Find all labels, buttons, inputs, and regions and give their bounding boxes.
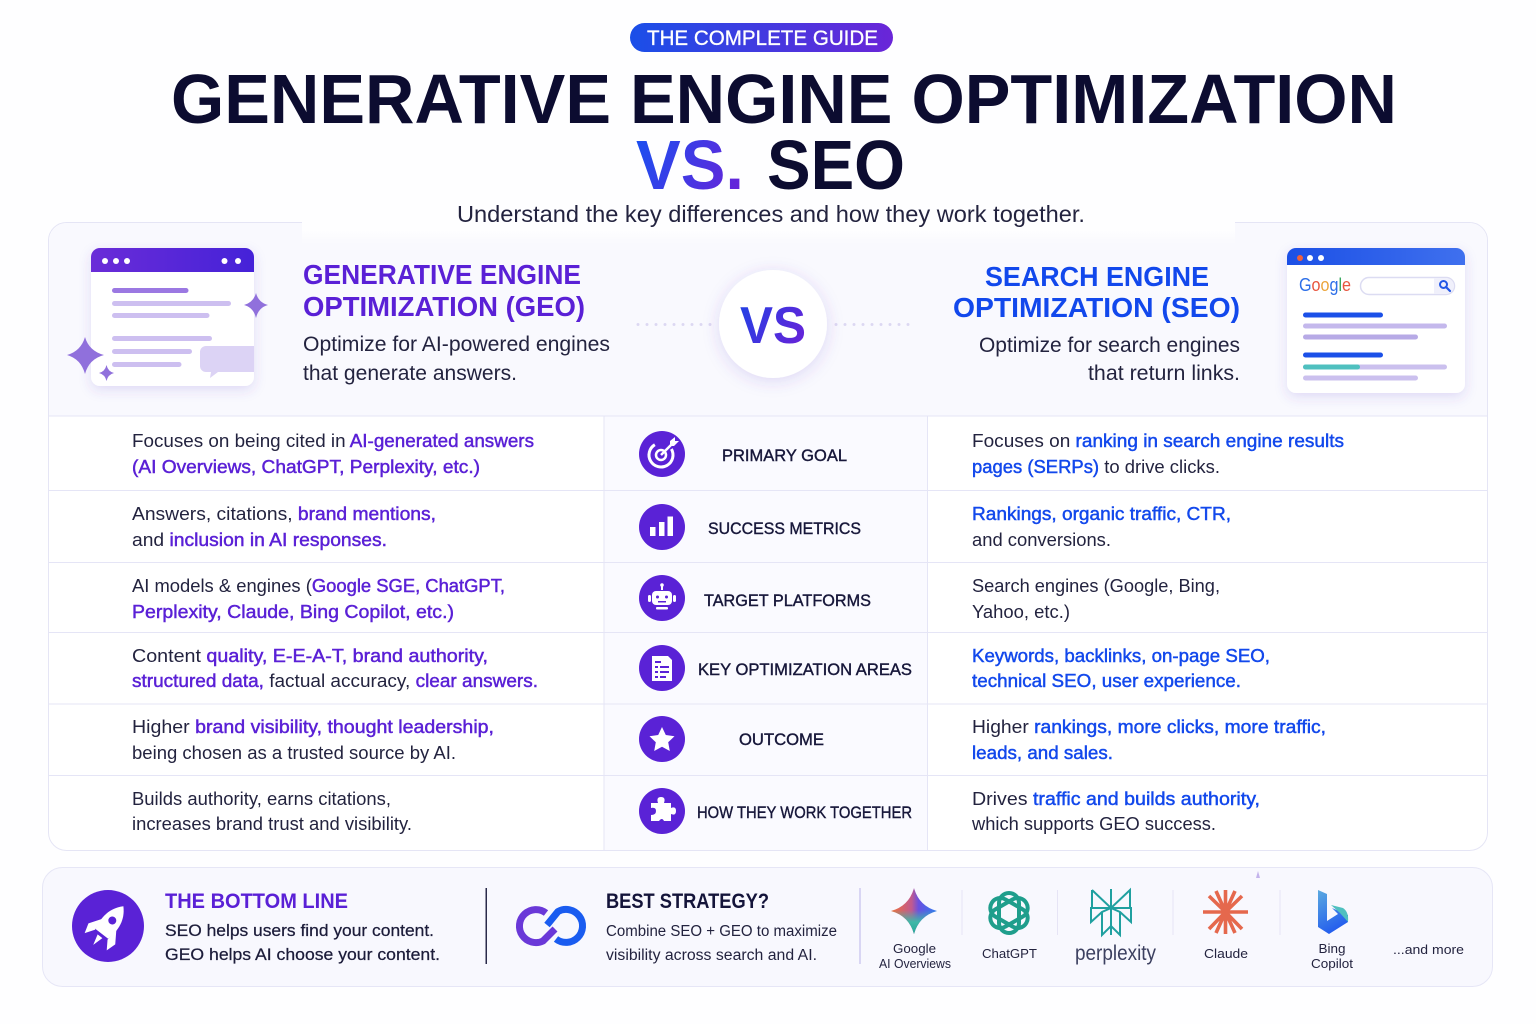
- GEO text: Builds authority, earns citations,: [132, 789, 391, 809]
- logo: Bing Copilot: Bing: [1318, 941, 1346, 956]
- illustration: SEO browser window: [1287, 248, 1465, 393]
- VS badge: VS: [740, 297, 806, 355]
- logo: perplexity: [1075, 889, 1156, 965]
- text: GEO description: that generate answers.: [303, 362, 517, 385]
- text: best strategy: Combine SEO + GEO to maximize: [606, 923, 837, 940]
- row: success metrics: [132, 504, 1231, 550]
- label: KEY OPTIMIZATION AREAS: [698, 660, 912, 679]
- text: SEO description: that return links.: [1088, 362, 1240, 385]
- row: primary goal: pages (SERPs) to drive clicks.: [972, 457, 1220, 477]
- label: SUCCESS METRICS: [708, 519, 861, 538]
- logo: ChatGPT: ChatGPT: [982, 946, 1037, 961]
- text: the bottom line: SEO helps users find your content.: [165, 921, 434, 940]
- GEO text: Higher brand visibility, thought leadership,: [132, 717, 494, 737]
- logo: Google AI Overviews: AI Overviews: [879, 956, 951, 971]
- SEO text: Rankings, organic traffic, CTR,: [972, 504, 1231, 524]
- heading: SEO: OPTIMIZATION (SEO): [953, 292, 1240, 323]
- logo: Google AI Overviews: [879, 888, 951, 971]
- SEO text: Keywords, backlinks, on-page SEO,: [972, 646, 1270, 666]
- label: PRIMARY GOAL: [722, 446, 847, 465]
- text: the bottom line: [165, 890, 440, 964]
- heading: GEO: OPTIMIZATION (GEO): [303, 291, 585, 322]
- icon: robot: [639, 575, 685, 621]
- panel: bottom strip: [42, 868, 1492, 986]
- text: and more: ...and more: [1393, 942, 1464, 957]
- row: outcome: being chosen as a trusted source by AI.: [132, 743, 456, 763]
- icon: star: [639, 716, 685, 762]
- row: outcome: [132, 716, 1326, 763]
- row: outcome: leads, and sales.: [972, 743, 1113, 763]
- label: OUTCOME: [739, 730, 824, 749]
- row: primary goal: (AI Overviews, ChatGPT, Perplexity, etc.): [132, 457, 480, 477]
- text: SEO description: [979, 334, 1240, 385]
- text: the bottom line: THE BOTTOM LINE: [165, 890, 348, 913]
- SEO text: Focuses on ranking in search engine results: [972, 431, 1344, 451]
- GEO text: Focuses on being cited in AI-generated answers: [132, 431, 534, 451]
- icon: chain link: [519, 909, 583, 943]
- logo: ChatGPT: [982, 893, 1037, 961]
- row: target platforms: Perplexity, Claude, Bing Copilot, etc.): [132, 602, 454, 622]
- logo: Bing Copilot: Copilot: [1311, 956, 1353, 971]
- heading: GEO: GENERATIVE ENGINE: [303, 259, 581, 290]
- heading: SEO: SEARCH ENGINE: [985, 261, 1209, 292]
- logo: Claude: [1203, 890, 1248, 961]
- row: how they work together: [132, 788, 1260, 834]
- title: SEO: [767, 126, 905, 204]
- illustration: GEO browser window: [67, 248, 268, 386]
- icon: puzzle: [639, 788, 685, 834]
- panel: comparison card: [48, 218, 1488, 850]
- heading: GEO: [303, 259, 585, 322]
- GEO text: Answers, citations, brand mentions,: [132, 504, 436, 524]
- text: GEO description: Optimize for AI-powered engines: [303, 333, 610, 356]
- SEO text: Drives traffic and builds authority,: [972, 789, 1260, 809]
- SEO text: Search engines (Google, Bing,: [972, 576, 1220, 596]
- text: GEO description: [303, 333, 610, 385]
- row: success metrics: and inclusion in AI responses.: [132, 530, 387, 550]
- row: how they work together: increases brand trust and visibility.: [132, 814, 412, 834]
- row: how they work together: which supports GEO success.: [971, 814, 1216, 834]
- icon: rocket: [72, 890, 144, 962]
- logo: Bing Copilot: [1311, 890, 1353, 971]
- title: VS.: [636, 126, 744, 204]
- row: key optimization areas: [132, 645, 1270, 691]
- text: SEO description: Optimize for search engines: [979, 334, 1240, 357]
- illustration: SEO browser window: Google: [1299, 275, 1351, 295]
- row: key optimization areas: structured data, factual accuracy, clear answers.: [132, 671, 538, 691]
- row: primary goal: [132, 431, 1344, 477]
- row: target platforms: [132, 575, 1220, 622]
- icon: target: [639, 431, 685, 477]
- row: key optimization areas: technical SEO, user experience.: [972, 671, 1241, 691]
- GEO text: Content quality, E-E-A-T, brand authority,: [132, 646, 488, 666]
- row: success metrics: and conversions.: [972, 530, 1111, 550]
- icon: bar chart: [639, 504, 685, 550]
- title: GENERATIVE ENGINE OPTIMIZATION: [171, 60, 1397, 138]
- GEO text: AI models & engines (Google SGE, ChatGPT,: [132, 576, 505, 596]
- badge: the complete guide: THE COMPLETE GUIDE: [647, 27, 878, 50]
- title: [171, 60, 1397, 204]
- SEO text: Higher rankings, more clicks, more traffic,: [972, 717, 1326, 737]
- row: target platforms: Yahoo, etc.): [972, 602, 1070, 622]
- icon: checklist: [639, 645, 685, 691]
- text: best strategy: [606, 890, 837, 964]
- subtitle: Understand the key differences and how they work together.: [457, 201, 1085, 227]
- label: TARGET PLATFORMS: [704, 591, 871, 610]
- logo: perplexity: perplexity: [1075, 942, 1156, 965]
- logo: Google AI Overviews: Google: [893, 941, 936, 956]
- logo: Claude: Claude: [1204, 946, 1248, 961]
- VS badge: [636, 270, 910, 378]
- text: best strategy: visibility across search and AI.: [606, 947, 817, 964]
- text: best strategy: BEST STRATEGY?: [606, 890, 769, 913]
- label: HOW THEY WORK TOGETHER: [697, 803, 912, 822]
- text: the bottom line: GEO helps AI choose your content.: [165, 945, 440, 964]
- heading: SEO: [953, 261, 1240, 323]
